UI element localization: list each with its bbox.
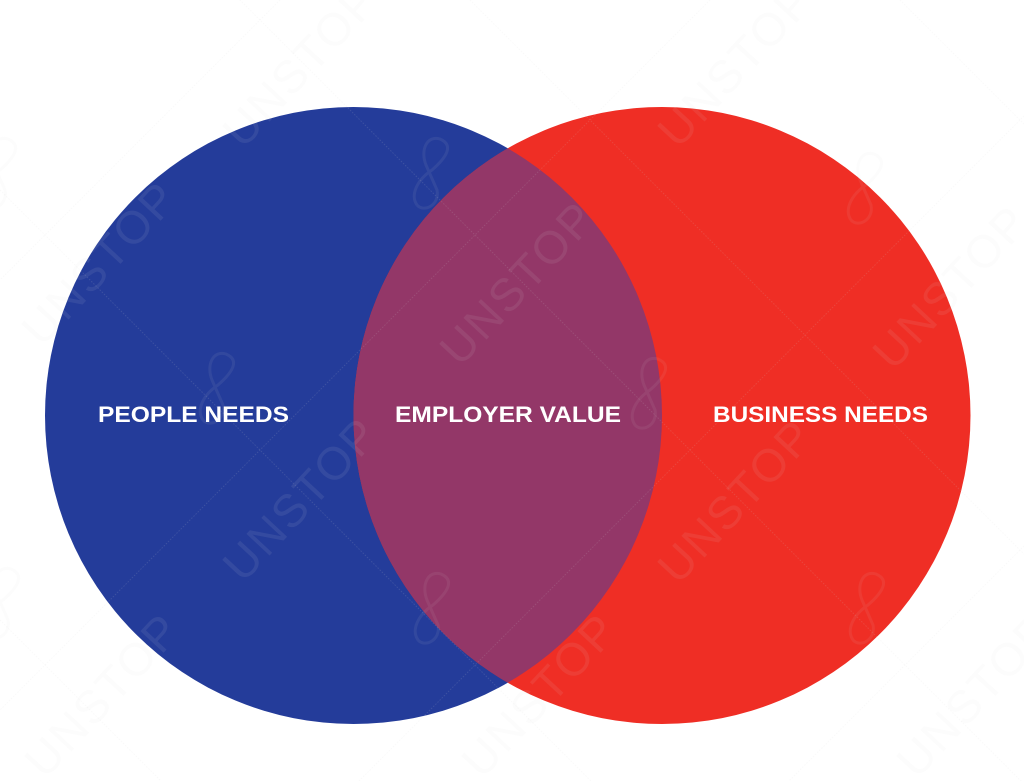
overlap: employer value bbox=[354, 148, 662, 683]
watermark text: UNSTOP bbox=[429, 191, 606, 375]
label: people needs: PEOPLE NEEDS bbox=[98, 402, 289, 427]
circle: people needs bbox=[45, 107, 662, 724]
label: business needs: BUSINESS NEEDS bbox=[713, 402, 928, 427]
circle: business needs bbox=[354, 107, 970, 724]
watermark logos bbox=[0, 138, 884, 643]
label: employer value: EMPLOYER VALUE bbox=[395, 402, 621, 427]
watermark text: UNSTOP bbox=[647, 409, 824, 593]
watermark text: UNSTOP bbox=[11, 171, 188, 355]
watermark text: UNSTOP bbox=[212, 407, 389, 591]
